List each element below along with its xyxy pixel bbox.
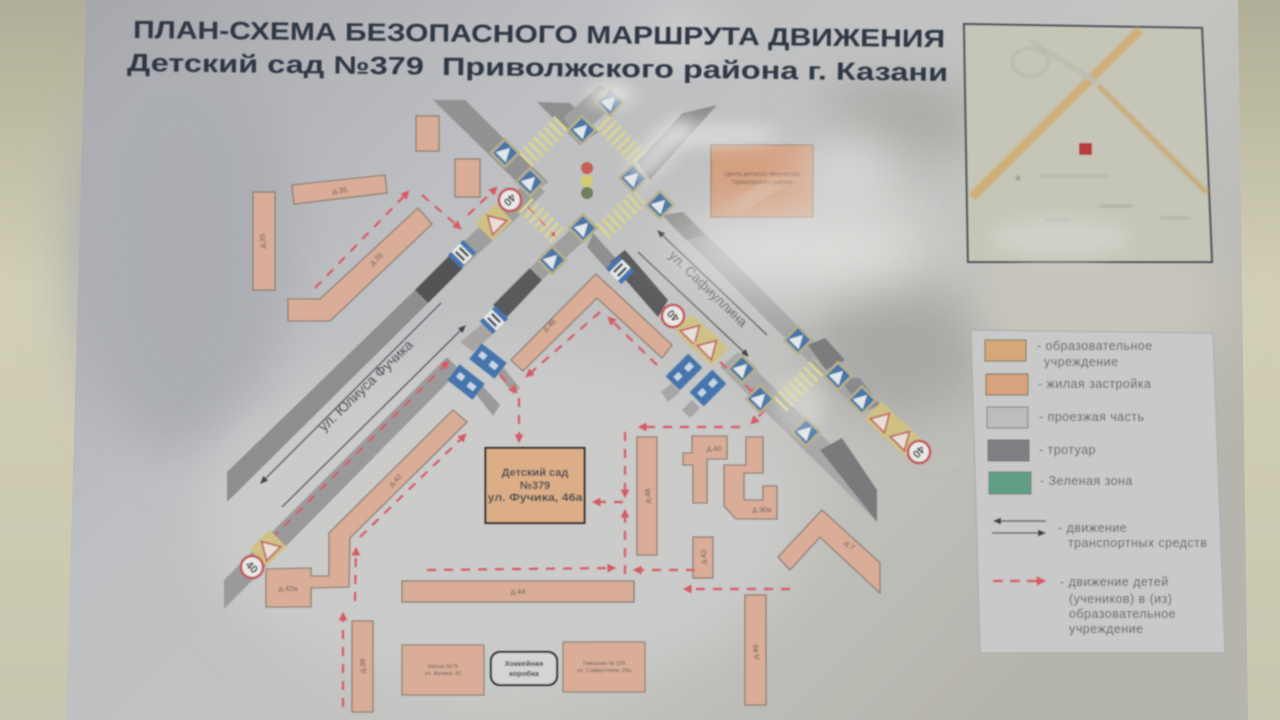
- inset location map: [964, 24, 1212, 262]
- orange institution: [711, 145, 813, 217]
- street Safiullina: ул. Сафиуллина: [666, 248, 751, 330]
- school: [402, 645, 484, 695]
- kindergarten: ул. Фучика, 46а: [488, 492, 583, 504]
- traffic light: [581, 162, 593, 199]
- legend: carriageway: - проезжая часть: [1039, 410, 1144, 424]
- legend: pavement: [988, 440, 1096, 461]
- title: [127, 16, 948, 87]
- hockey box: коробка: [509, 669, 540, 678]
- building labels: д.46: [751, 645, 760, 659]
- street Safiullina: [638, 231, 767, 356]
- road signs: [250, 86, 921, 566]
- legend: vehicle traffic: транспортных средств: [1068, 536, 1207, 550]
- gymnasium: ул. Сафиуллина, 29а: [577, 668, 632, 674]
- legend: educational institution: учреждение: [1044, 355, 1118, 369]
- building labels: д.35: [332, 185, 348, 196]
- map drawing: [224, 85, 930, 712]
- lighting on poster: [70, 50, 1220, 690]
- school: Школа №79: [428, 664, 458, 670]
- speed limit signs: [241, 189, 930, 578]
- speed limit signs: 40: [665, 307, 682, 324]
- legend: residential: - жилая застройка: [1038, 377, 1151, 391]
- speed limit signs: 40: [910, 443, 927, 460]
- building labels: д.42а: [279, 584, 298, 593]
- speed limit signs: 40: [501, 191, 518, 208]
- building labels: д.42: [387, 472, 404, 489]
- street Fuchika: ул. Юлиуса Фучика: [315, 336, 416, 434]
- kindergarten: [486, 448, 584, 523]
- road strips: [224, 85, 880, 609]
- legend: vehicle traffic: - движение: [1058, 521, 1127, 535]
- hockey box: Хоккейная: [505, 659, 543, 668]
- legend: educational institution: [985, 339, 1153, 369]
- legend: children route: образовательное: [1069, 607, 1176, 621]
- gymnasium: [563, 642, 645, 692]
- building labels: д.40: [707, 444, 721, 453]
- orange institution: Приволжского района: [732, 179, 793, 186]
- crosswalks: [525, 122, 820, 405]
- building labels: д.38: [358, 659, 367, 673]
- building labels: д.35: [368, 251, 385, 268]
- title: ПЛАН-СХЕМА БЕЗОПАСНОГО МАРШРУТА ДВИЖЕНИЯ: [133, 16, 945, 53]
- legend: carriageway: [987, 407, 1144, 428]
- kindergarten: №379: [520, 480, 550, 492]
- hockey box: [491, 652, 557, 685]
- street Fuchika: [261, 303, 465, 507]
- legend: educational institution: - образовательное: [1037, 339, 1153, 353]
- building labels: д.42: [699, 550, 708, 564]
- building labels: [258, 185, 857, 673]
- legend: children route: учреждение: [1069, 622, 1143, 636]
- legend: children route: [993, 575, 1176, 636]
- orange institution: Центр детского творчества: [724, 172, 800, 178]
- building labels: д.46: [541, 317, 558, 334]
- building labels: д.48: [643, 489, 652, 503]
- title: Детский сад №379 Приволжского района г. Казани: [127, 49, 948, 87]
- legend: [971, 330, 1225, 653]
- buildings: [253, 116, 880, 712]
- glare on laminate: [588, 20, 930, 435]
- child route arrows: [272, 188, 790, 707]
- kindergarten: Детский сад: [502, 467, 568, 479]
- speed limit signs: 40: [243, 559, 260, 576]
- building labels: д.35: [258, 234, 267, 248]
- building labels: д.7: [843, 538, 857, 552]
- school: ул. Фучика, 42: [425, 671, 461, 677]
- legend: children route: - движение детей: [1060, 575, 1169, 589]
- legend: residential: [986, 374, 1151, 395]
- legend: green zone: [989, 472, 1133, 494]
- building labels: д.44: [511, 587, 525, 596]
- gymnasium: Гимназия № 139: [583, 661, 625, 667]
- legend: pavement: - тротуар: [1039, 443, 1096, 457]
- legend: vehicle traffic: [992, 521, 1207, 550]
- legend: green zone: - Зеленая зона: [1040, 474, 1133, 488]
- building labels: д.30а: [753, 505, 772, 514]
- legend: children route: (учеников) в (из): [1069, 592, 1172, 606]
